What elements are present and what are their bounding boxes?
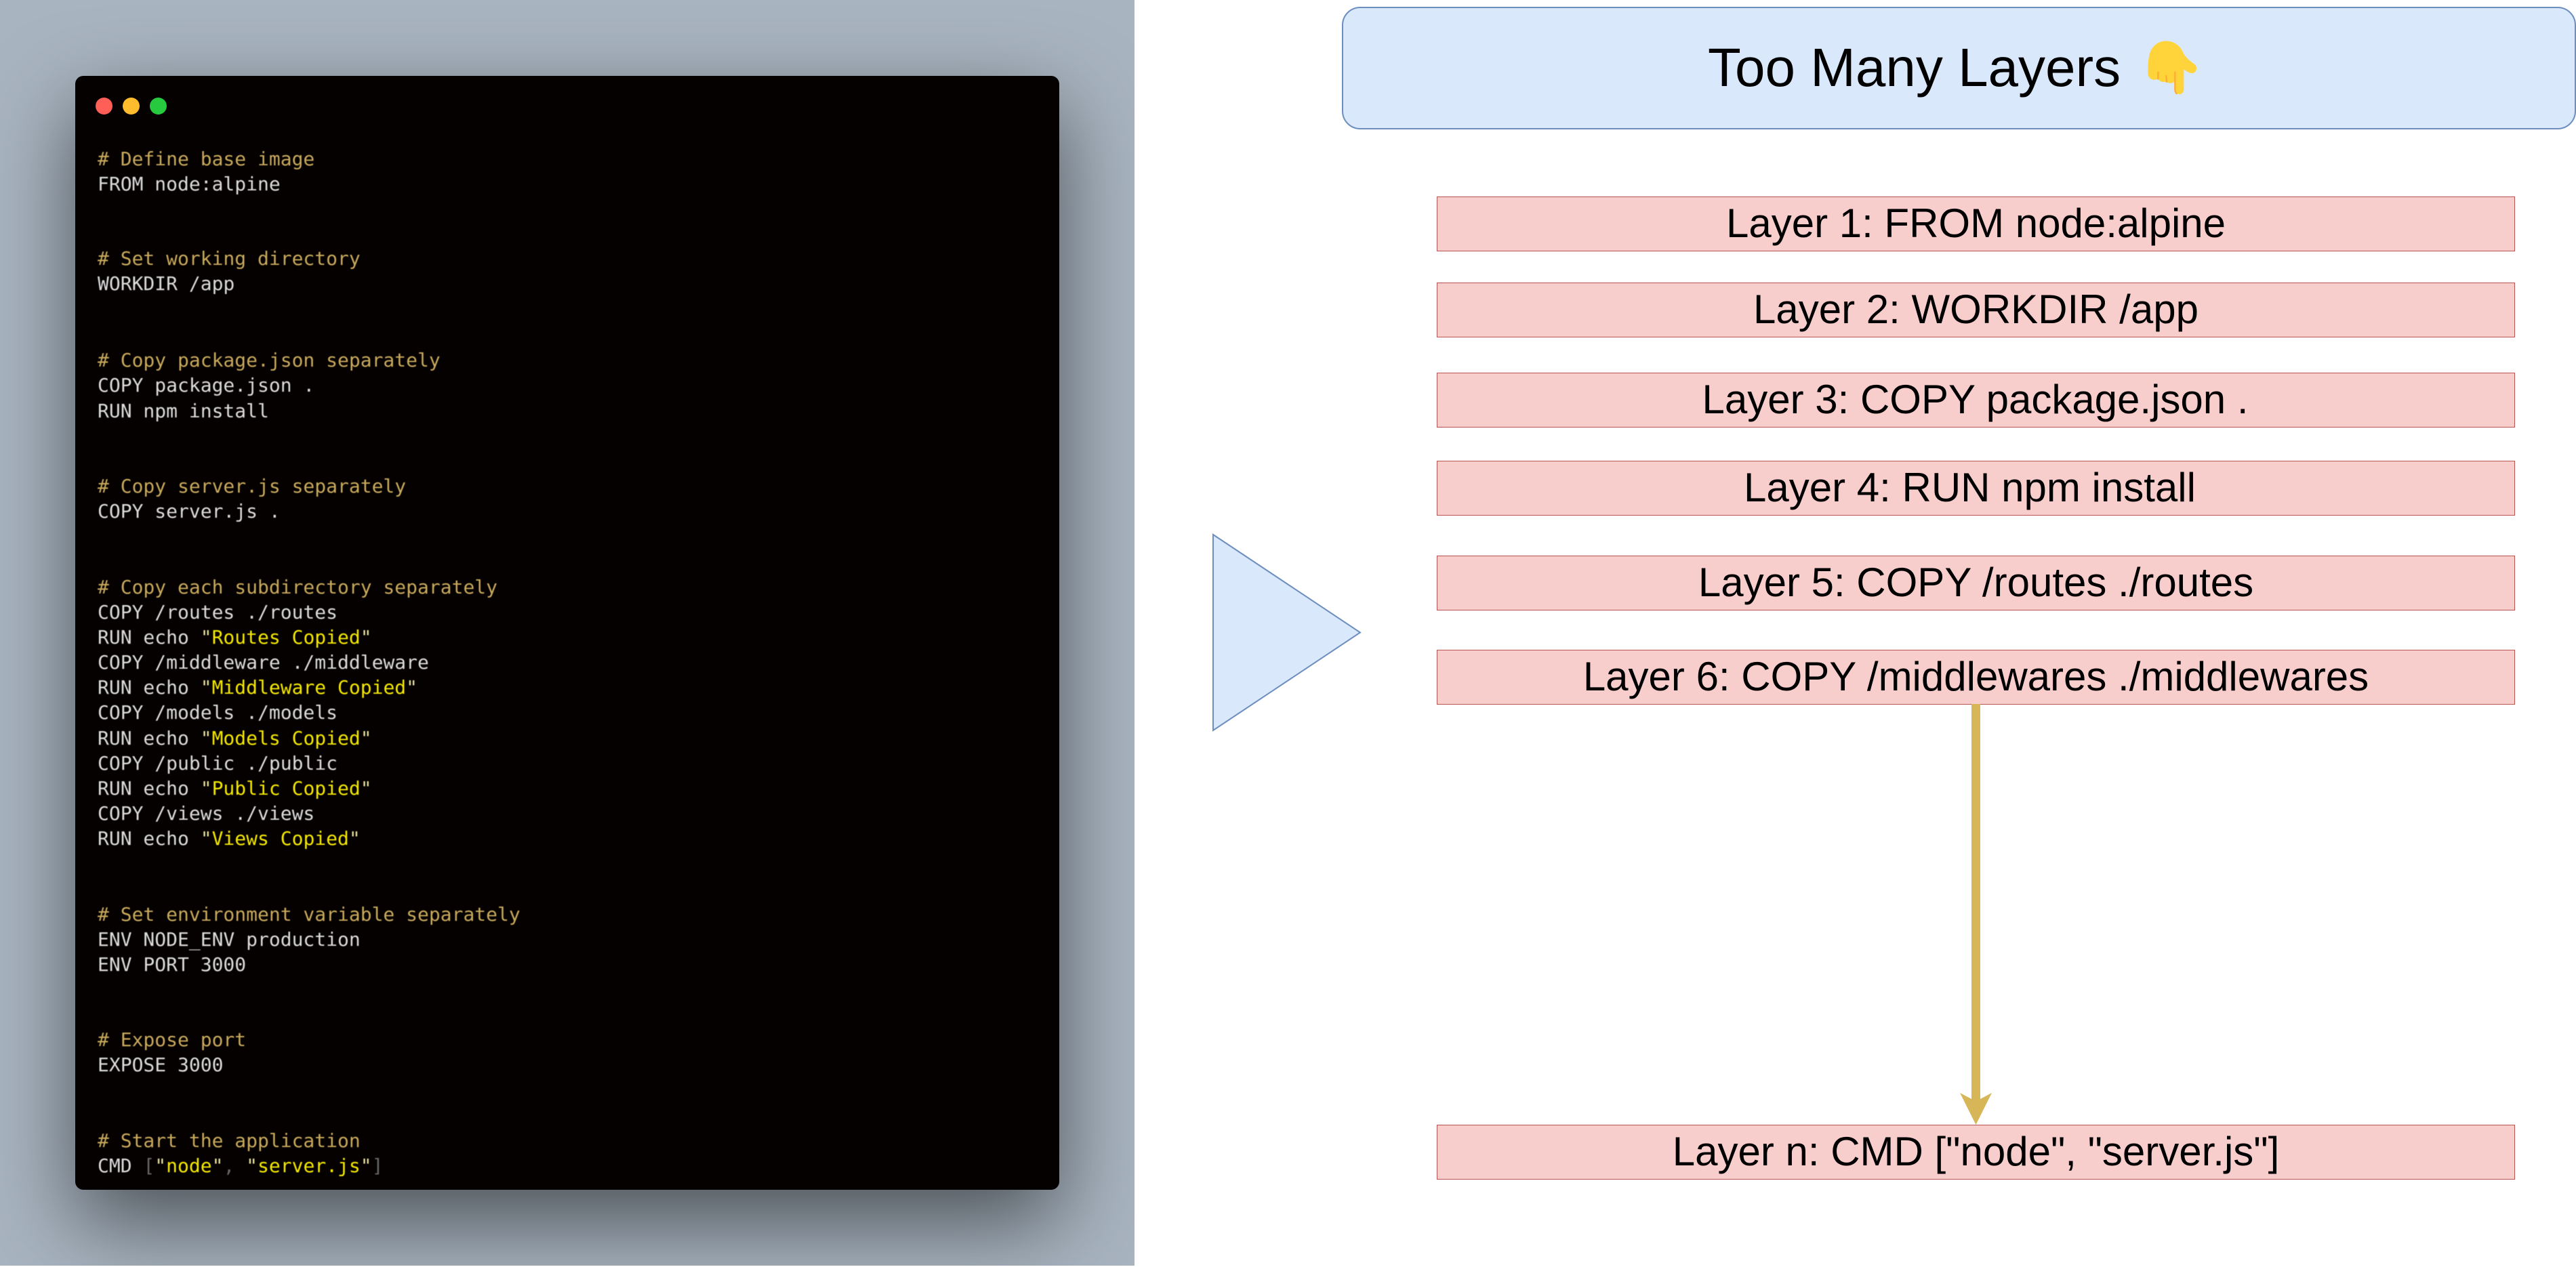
layer 3 box: Layer 3: COPY package.json .: [1702, 377, 2249, 422]
title: Too Many Layers: [1708, 37, 2121, 98]
arrow: gold arrow from layer 6 to layer n: [1960, 704, 1992, 1125]
layer n box: [1437, 1125, 2515, 1179]
code: copy server.js: # Copy server.js separately COPY server.js .: [98, 475, 406, 522]
code: copy subdirectories: # Copy each subdirectory separately COPY /routes ./routes RUN echo "Routes Copied" COPY /middleware ./middleware RUN echo "Middleware Copied" COPY /models ./models RUN echo "Models Copied" COPY /public ./public RUN echo "Public Copied" COPY /views ./views RUN echo "Views Copied": [98, 576, 497, 850]
code: environment variables: # Set environment variable separately ENV NODE_ENV production ENV PORT 3000: [98, 902, 520, 976]
icon: red window dot: [96, 98, 113, 115]
layer 4 box: Layer 4: RUN npm install: [1744, 465, 2196, 510]
layer 4 box: [1437, 461, 2515, 516]
layer 6 box: Layer 6: COPY /middlewares ./middlewares: [1583, 654, 2369, 699]
layer 5 box: [1437, 556, 2515, 610]
layer 3 box: [1437, 373, 2515, 428]
panel: code background: [0, 0, 1134, 1266]
layer 6 box: [1437, 650, 2515, 705]
layer 5 box: Layer 5: COPY /routes ./routes: [1698, 560, 2253, 605]
layer 2 box: [1437, 283, 2515, 337]
icon: hand pointing down: [2148, 41, 2196, 95]
panel: Dockerfile code window: [75, 76, 1059, 1190]
code: working directory: # Set working directory WORKDIR /app: [98, 247, 361, 295]
layer 1 box: Layer 1: FROM node:alpine: [1726, 201, 2226, 246]
icon: green window dot: [150, 98, 167, 115]
layer 1 box: [1437, 196, 2515, 251]
heading: Too Many Layers banner: [1342, 7, 2576, 129]
code: base image: # Define base image FROM node:alpine: [98, 148, 314, 195]
arrow: triangle pointing right: [1212, 533, 1362, 732]
code: start application: # Start the application CMD ["node", "server.js"]: [98, 1129, 383, 1177]
code: copy package.json: # Copy package.json separately COPY package.json . RUN npm install: [98, 349, 441, 421]
icon: yellow window dot: [123, 98, 140, 115]
code: expose port: # Expose port EXPOSE 3000: [98, 1029, 246, 1076]
layer n box: Layer n: CMD ["node", "server.js"]: [1673, 1129, 2279, 1173]
layer 2 box: Layer 2: WORKDIR /app: [1753, 287, 2199, 332]
